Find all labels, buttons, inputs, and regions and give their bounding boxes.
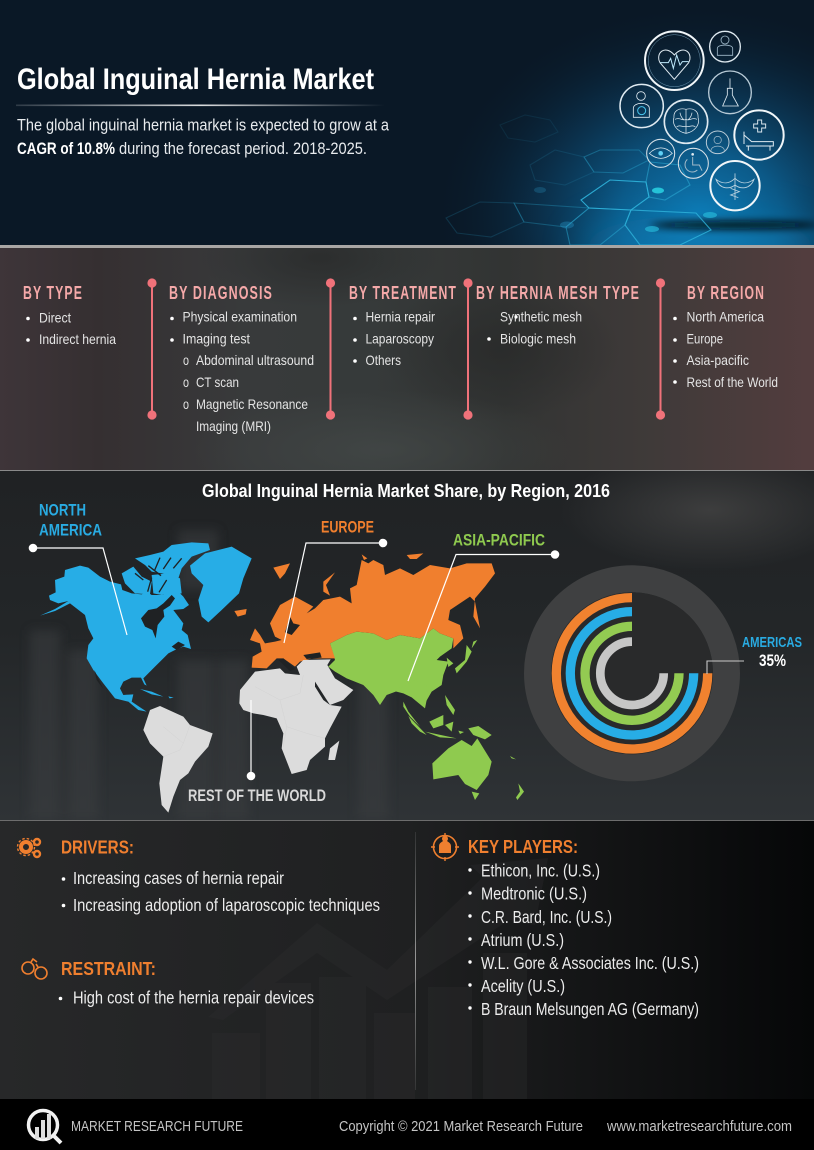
segment: by hernia mesh type [476, 283, 640, 346]
icon: eye [647, 139, 675, 167]
callout: europe: EUROPE [321, 517, 374, 536]
key players list: Ethicon, Inc. (U.S.) [481, 861, 600, 881]
callout: north america [29, 501, 127, 635]
restraint list: High cost of the hernia repair devices [73, 987, 314, 1007]
panel: drivers, restraint and key players [0, 821, 814, 1099]
title: Global Inguinal Hernia Market [17, 63, 374, 96]
segment: by treatment: Hernia repair [366, 309, 435, 325]
segment: by treatment: Laparoscopy [366, 330, 434, 346]
divider marker 1 [147, 278, 157, 420]
panel: regional market share [0, 450, 814, 820]
divider marker 4 [656, 278, 665, 420]
divider marker 2 [326, 278, 335, 420]
callout: europe [284, 517, 387, 643]
segment: by hernia mesh type: BY HERNIA MESH TYPE [476, 283, 640, 303]
callout: north america: NORTH [39, 501, 86, 520]
copyright: Copyright © 2021 Market Research Future [339, 1118, 583, 1135]
callout: asia-pacific: ASIA-PACIFIC [453, 530, 545, 549]
heading: key players: KEY PLAYERS: [468, 836, 578, 857]
drivers list [62, 868, 380, 915]
key players list: Medtronic (U.S.) [481, 884, 587, 904]
subtitle: CAGR of 10.8% [17, 140, 115, 158]
segment: by diagnosis: o [183, 396, 189, 412]
heading: drivers: DRIVERS: [61, 836, 134, 857]
segment: by diagnosis: o [183, 352, 189, 368]
icon cluster: medical circles [620, 31, 784, 210]
icon: brain [664, 100, 708, 143]
key players list: W.L. Gore & Associates Inc. (U.S.) [481, 953, 699, 973]
segment: by type: BY TYPE [23, 283, 83, 303]
footer [0, 1099, 814, 1150]
segment: by region: Rest of the World [686, 374, 778, 390]
icon: wheelchair [678, 148, 708, 178]
icon: handcuffs [22, 959, 47, 979]
segment: by diagnosis: o [183, 374, 189, 390]
segment: by region [673, 283, 778, 390]
panel: header [0, 0, 814, 245]
callout: rest of the world [188, 700, 326, 805]
segment: by diagnosis: Imaging test [182, 330, 250, 346]
key players list: B Braun Melsungen AG (Germany) [481, 999, 699, 1019]
segment: by diagnosis: Abdominal ultrasound [196, 352, 314, 368]
callout: north america: AMERICA [39, 521, 102, 540]
icon: gears [18, 838, 40, 857]
key players list: Acelity (U.S.) [481, 976, 565, 996]
segment: by region: Asia-pacific [686, 352, 749, 368]
segment: by type [23, 283, 116, 347]
subtitle [17, 116, 390, 158]
subtitle: during the forecast period. 2018-2025. [119, 140, 367, 158]
segment: by treatment: BY TREATMENT [349, 283, 457, 303]
map: rest of the world [143, 659, 353, 813]
segment: by hernia mesh type: Biologic mesh [500, 330, 576, 346]
key players list: C.R. Bard, Inc. (U.S.) [481, 907, 612, 927]
brand name: MARKET RESEARCH FUTURE [71, 1118, 243, 1135]
website: www.marketresearchfuture.com [606, 1118, 792, 1135]
hexagon network [446, 115, 717, 245]
icon: logo [28, 1110, 61, 1143]
segment: by diagnosis: Physical examination [182, 309, 297, 325]
segment: by treatment: Others [366, 352, 401, 368]
world map [40, 542, 524, 813]
icon: heart [645, 31, 704, 90]
segment: by diagnosis: Imaging (MRI) [196, 418, 271, 434]
key players list [468, 861, 699, 1019]
callout: rest of the world: REST OF THE WORLD [188, 786, 326, 805]
icon: hospital bed [734, 110, 784, 160]
icon: nurse [706, 131, 729, 154]
segment: by type: Direct [39, 309, 71, 325]
divider [415, 832, 416, 1090]
chart title: Global Inguinal Hernia Market Share, by Region, 2016 [202, 481, 610, 501]
segment: by type: Indirect hernia [39, 331, 116, 347]
segment: by diagnosis: BY DIAGNOSIS [169, 283, 273, 303]
segment: by diagnosis: CT scan [196, 374, 239, 390]
map: europe and russia [234, 553, 495, 671]
subtitle: The global inguinal hernia market is expected to grow at a [17, 116, 390, 134]
segment: by diagnosis [169, 283, 314, 434]
map: north america [40, 542, 252, 712]
icon: person with scan [620, 84, 663, 128]
divider marker 3 [463, 278, 473, 420]
segment: by diagnosis: Magnetic Resonance [196, 396, 308, 412]
segment: by treatment [349, 283, 457, 368]
icon: key players [431, 833, 459, 861]
donut chart [538, 579, 726, 768]
callout: asia-pacific [408, 530, 559, 681]
drivers list: Increasing adoption of laparoscopic techniques [73, 895, 380, 915]
drivers list: Increasing cases of hernia repair [73, 868, 284, 888]
map: asia-pacific [328, 628, 524, 800]
panel: segmentation [0, 248, 814, 470]
segment: by region: Europe [686, 330, 723, 346]
icon: flask [709, 71, 751, 114]
background arrow chart [208, 858, 548, 1099]
segment: by hernia mesh type: Synthetic mesh [500, 309, 582, 325]
key players list: Atrium (U.S.) [481, 930, 564, 950]
heading: restraint: RESTRAINT: [61, 958, 156, 979]
icon: caduceus [710, 161, 760, 210]
segment: by region: North America [686, 309, 764, 325]
segment: by region: BY REGION [687, 283, 765, 303]
callout: americas 35%: 35% [759, 651, 786, 670]
icon: doctor [710, 31, 740, 62]
callout: americas 35% [707, 634, 802, 674]
